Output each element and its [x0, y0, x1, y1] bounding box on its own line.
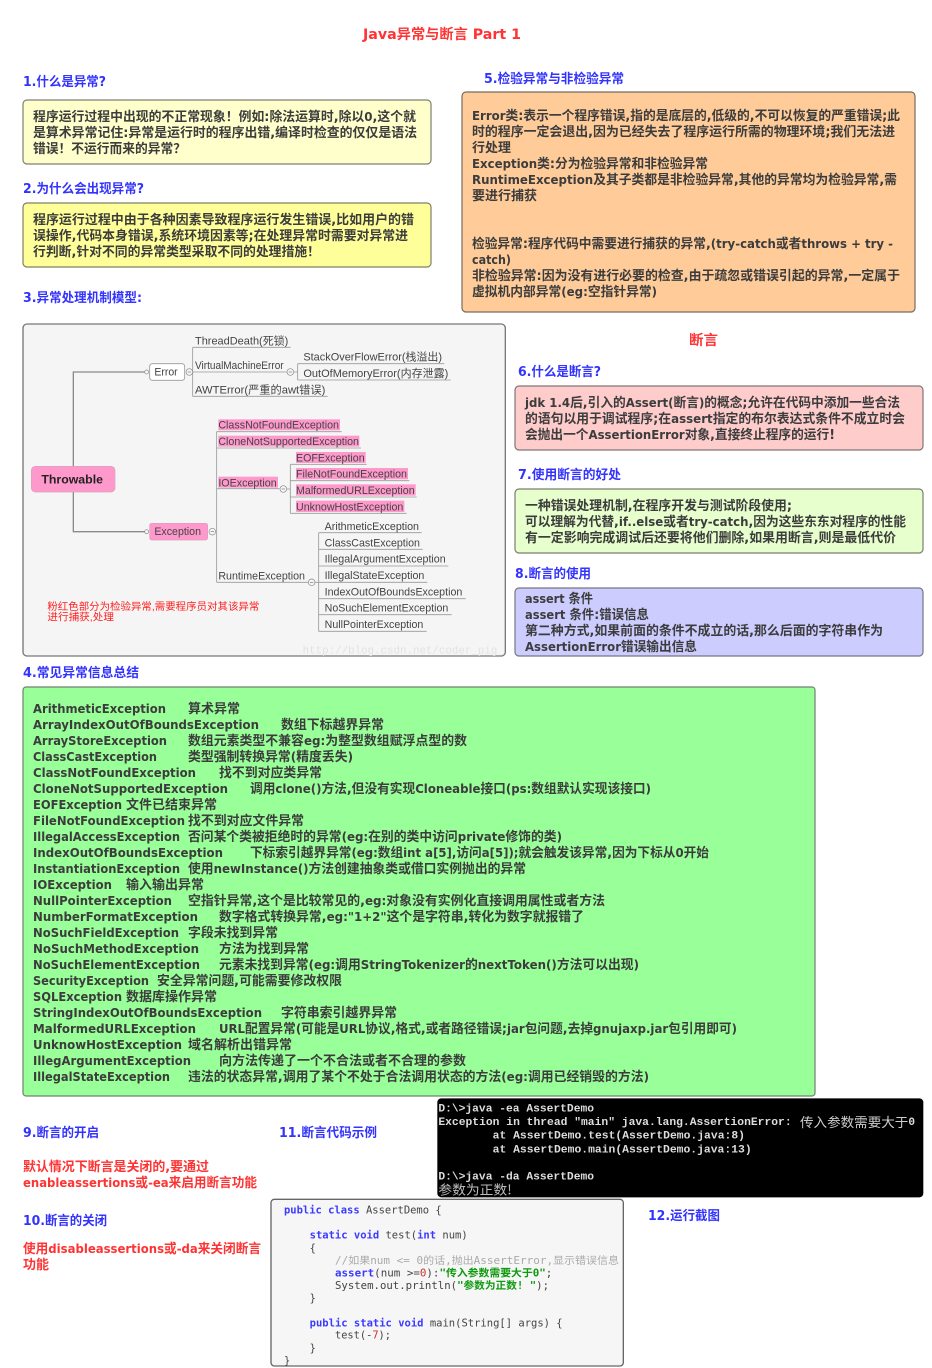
panel: common exception list — [23, 687, 815, 1096]
chart: Throwable mind map — [23, 324, 505, 657]
branch: runtime exceptions: IndexOutOfBoundsException — [325, 586, 462, 598]
panel: terminal screenshot — [437, 1098, 923, 1198]
branch: Error children — [193, 333, 451, 396]
panel: common exception list: InstantiationException — [33, 862, 180, 876]
panel: common exception list: NullPointerException — [33, 894, 172, 908]
panel: what is assert: jdk 1.4后,引入的Assert(断言)的概念;允许在代码中添加一些合法 — [524, 395, 900, 411]
branch: Error children: StackOverFlowError(栈溢出) — [303, 350, 442, 364]
panel: common exception list: ArithmeticException — [33, 702, 166, 716]
panel: code sample: //如果num <= 0的话,抛出AssertError,显示错误信息 — [335, 1254, 619, 1267]
panel: common exception list: 文件已结束异常 — [126, 797, 217, 813]
panel: common exception list: 字段未找到异常 — [188, 925, 278, 941]
panel: common exception list: 下标索引越界异常(eg:数组int a[5],访问a[5]);就会触发该异常,因为下标从0开始 — [250, 845, 709, 861]
note: pink meaning — [47, 600, 259, 624]
panel: common exception list: IOException — [33, 878, 112, 892]
panel: checked and unchecked exceptions: Error类:表示一个程序错误,指的是底层的,低级的,不可以恢复的严重错误;此 — [472, 108, 900, 124]
branch: checked exceptions in pink: UnknowHostException — [296, 501, 403, 513]
panel: what is an exception: 是算术异常记住:异常是运行时的程序出错,编译时检查的仅仅是语法 — [33, 125, 417, 141]
note: pink meaning: 进行捕获,处理 — [47, 611, 114, 624]
branch: runtime exceptions: ClassCastException — [325, 537, 420, 549]
branch: runtime exceptions: IllegalStateException — [325, 570, 424, 582]
panel: code sample: } — [284, 1355, 290, 1367]
node: Throwable — [31, 466, 115, 492]
panel: common exception list: 找不到对应文件异常 — [188, 813, 304, 829]
panel: common exception list: CloneNotSupportedException — [33, 782, 228, 796]
panel: terminal screenshot: at AssertDemo.main(AssertDemo.java:13) — [493, 1144, 752, 1156]
panel: checked and unchecked exceptions: 要进行捕获 — [472, 188, 537, 204]
panel: code sample: } — [310, 1343, 316, 1355]
heading: 9 enabling assertions: 9.断言的开启 — [23, 1125, 99, 1141]
heading: 11 code sample: 11.断言代码示例 — [279, 1125, 377, 1141]
panel: common exception list: 方法为找到异常 — [219, 941, 309, 957]
node: Exception — [145, 523, 216, 540]
branch: Error children: VirtualMachineError — [195, 360, 284, 372]
panel: checked and unchecked exceptions: 行处理 — [472, 140, 511, 156]
panel: common exception list: URL配置异常(可能是URL协议,格式,或者路径错误;jar包问题,去掉gnujaxp.jar包引用即可) — [219, 1021, 737, 1037]
text: enabling assertions: enableassertions或-ea来启用断言功能 — [23, 1175, 257, 1191]
panel: common exception list: NoSuchMethodException — [33, 942, 199, 956]
panel: code sample: { — [310, 1242, 316, 1254]
branch: runtime exceptions: NoSuchElementException — [325, 603, 448, 615]
panel: checked and unchecked exceptions: catch) — [472, 253, 511, 267]
panel: common exception list: EOFException — [33, 798, 122, 812]
node: Error — [145, 364, 193, 380]
panel: common exception list: 输入输出异常 — [126, 877, 204, 893]
branch: checked exceptions in pink: CloneNotSupportedException — [218, 436, 359, 448]
panel: what is assert: 会抛出一个AssertionError对象,直接终止程序的运行! — [525, 427, 835, 443]
heading: 7 benefits: 7.使用断言的好处 — [518, 467, 621, 483]
panel: common exception list: ArrayStoreException — [33, 734, 167, 748]
panel: common exception list: MalformedURLException — [33, 1022, 196, 1036]
panel: common exception list: 向方法传递了一个不合法或者不合理的参数 — [219, 1053, 466, 1069]
heading: 8 usage: 8.断言的使用 — [515, 566, 591, 582]
panel: benefits of assertions: 可以理解为代替,if..else或者try-catch,因为这些东东对程序的性能 — [525, 514, 906, 530]
panel: common exception list: StringIndexOutOfBoundsException — [33, 1006, 262, 1020]
panel: checked and unchecked exceptions: 非检验异常:因为没有进行必要的检查,由于疏忽或错误引起的异常,一定属于 — [472, 268, 900, 284]
panel: why exceptions occur — [23, 203, 431, 267]
panel: common exception list: 数组下标越界异常 — [281, 717, 384, 733]
heading: 6 what is assert: 6.什么是断言? — [518, 364, 601, 380]
panel: common exception list: ArrayIndexOutOfBoundsException — [33, 718, 259, 732]
panel: common exception list: 找不到对应类异常 — [219, 765, 322, 781]
panel: why exceptions occur: 误操作,代码本身错误,系统环境因素等;在处理异常时需要对异常进 — [33, 228, 408, 244]
branch: checked exceptions in pink: MalformedURLException — [296, 485, 415, 497]
panel: code sample: static void test(int num) — [310, 1230, 468, 1242]
text: disabling assertions: 使用disableassertions或-da来关闭断言 — [23, 1241, 261, 1257]
panel: common exception list: SecurityException — [33, 974, 149, 988]
panel: assert usage: assert 条件:错误信息 — [525, 607, 649, 623]
panel: common exception list: 类型强制转换异常(精度丢失) — [188, 749, 353, 765]
panel: why exceptions occur: 行判断,针对不同的异常类型采取不同的处理措施！ — [33, 241, 320, 260]
node: Error: Error — [154, 366, 178, 378]
panel: assert usage — [515, 588, 923, 656]
panel: terminal screenshot: D:\>java -ea AssertDemo — [438, 1104, 594, 1116]
panel: what is an exception: 错误！不运行而来的异常？ — [33, 138, 186, 157]
panel: code sample: public class AssertDemo { — [284, 1205, 442, 1217]
panel: assert usage: 第二种方式,如果前面的条件不成立的话,那么后面的字符串作为 — [525, 623, 883, 639]
panel: common exception list: NoSuchFieldException — [33, 926, 179, 940]
panel: common exception list: 调用clone()方法,但没有实现Cloneable接口(ps:数组默认实现该接口) — [250, 781, 651, 797]
panel: checked and unchecked exceptions: RuntimeException及其子类都是非检验异常,其他的异常均为检验异常,需 — [472, 172, 897, 188]
panel: common exception list: 安全异常问题,可能需要修改权限 — [157, 973, 342, 989]
branch: checked exceptions in pink: EOFException — [296, 452, 365, 464]
panel: assert usage: assert 条件 — [525, 591, 593, 607]
heading: 2 why exceptions occur: 2.为什么会出现异常? — [23, 181, 144, 197]
panel: what is assert — [515, 386, 923, 450]
branch: checked exceptions in pink — [217, 419, 417, 582]
branch: runtime exceptions: IllegalArgumentException — [325, 554, 446, 566]
panel: what is an exception: 程序运行过程中出现的不正常现象！例如:除法运算时,除以0,这个就 — [33, 106, 416, 125]
branch: checked exceptions in pink: ClassNotFoundException — [218, 420, 339, 432]
panel: code sample: test(-7); — [335, 1330, 391, 1342]
panel: common exception list: 域名解析出错异常 — [188, 1037, 292, 1053]
branch: runtime exceptions: RuntimeException — [218, 570, 305, 582]
heading: 5 checked and unchecked: 5.检验异常与非检验异常 — [484, 71, 624, 87]
panel: code sample — [271, 1199, 623, 1367]
panel: common exception list: FileNotFoundException — [33, 814, 185, 828]
panel: common exception list: IndexOutOfBoundsException — [33, 846, 223, 860]
panel: terminal screenshot: Exception in thread "main" java.lang.AssertionError: — [438, 1117, 792, 1129]
panel: what is assert: 的语句以用于调试程序;在assert指定的布尔表达式条件不成立时会 — [525, 411, 905, 427]
panel: common exception list: SQLException — [33, 990, 122, 1004]
node: Throwable: Throwable — [41, 472, 103, 486]
heading: assertions: 断言 — [689, 332, 718, 349]
panel: benefits of assertions — [515, 489, 923, 553]
branch: checked exceptions in pink: IOException — [218, 477, 277, 489]
panel: common exception list: 否问某个类被拒绝时的异常(eg:在别的类中访问private修饰的类) — [188, 829, 562, 845]
heading: 3 exception handling model: 3.异常处理机制模型: — [23, 290, 142, 306]
panel: common exception list: 数组元素类型不兼容eg:为整型数组赋浮点型的数 — [188, 733, 467, 749]
panel: terminal screenshot: at AssertDemo.test(AssertDemo.java:8) — [493, 1131, 745, 1143]
panel: code sample: assert(num >=0):"传入参数需要大于0"; — [335, 1266, 552, 1279]
panel: common exception list: NumberFormatException — [33, 910, 198, 924]
panel: common exception list: 数字格式转换异常,eg:"1+2"这个是字符串,转化为数字就报错了 — [219, 909, 584, 925]
panel: common exception list: IllegalStateException — [33, 1070, 170, 1084]
panel: terminal screenshot: 0 — [908, 1117, 915, 1129]
panel: terminal screenshot: 传入参数需要大于 — [800, 1112, 908, 1131]
panel: checked and unchecked exceptions: Exception类:分为检验异常和非检验异常 — [472, 156, 708, 172]
panel: code sample: System.out.println("参数为正数! "); — [335, 1279, 549, 1292]
branch: Error children: ThreadDeath(死锁) — [195, 333, 288, 347]
panel: common exception list: NoSuchElementException — [33, 958, 200, 972]
node: Exception: Exception — [154, 526, 201, 538]
branch: Error children: OutOfMemoryError(内存泄露) — [303, 366, 448, 380]
text: disabling assertions — [23, 1241, 261, 1273]
panel: benefits of assertions: 有一定影响完成调试后还要将他们删除,如果用断言,则是最低代价 — [525, 530, 896, 546]
panel: common exception list: 空指针异常,这个是比较常见的,eg:对象没有实例化直接调用属性或者方法 — [188, 893, 605, 909]
panel: terminal screenshot: D:\>java -da AssertDemo — [438, 1172, 594, 1184]
panel: what is an exception — [23, 100, 431, 164]
panel: benefits of assertions: 一种错误处理机制,在程序开发与测试阶段使用; — [525, 498, 792, 514]
branch: runtime exceptions: NullPointerException — [325, 619, 423, 631]
panel: common exception list: IllegalAccessException — [33, 830, 180, 844]
panel: common exception list: ClassCastException — [33, 750, 157, 764]
panel: common exception list: 使用newInstance()方法创建抽象类或借口实例抛出的异常 — [188, 861, 526, 877]
panel: checked and unchecked exceptions — [462, 92, 915, 312]
text: enabling assertions: 默认情况下断言是关闭的,要通过 — [23, 1159, 209, 1175]
panel: checked and unchecked exceptions: 虚拟机内部异常(eg:空指针异常) — [472, 284, 657, 300]
panel: common exception list: 违法的状态异常,调用了某个不处于合法调用状态的方法(eg:调用已经销毁的方法) — [188, 1069, 649, 1085]
panel: checked and unchecked exceptions: 检验异常:程序代码中需要进行捕获的异常,(try-catch或者throws + try - — [472, 236, 893, 252]
heading: 1 what is an exception: 1.什么是异常? — [23, 74, 106, 90]
branch: checked exceptions in pink: FileNotFoundException — [296, 469, 407, 481]
note: pink meaning: 粉红色部分为检验异常,需要程序员对其该异常 — [47, 600, 259, 613]
watermark: http://blog.csdn.net/coder_pig — [303, 645, 497, 657]
panel: checked and unchecked exceptions: 时的程序一定会退出,因为已经失去了程序运行所需的物理环境;我们无法进 — [472, 124, 895, 140]
heading: 10 disabling assertions: 10.断言的关闭 — [23, 1213, 107, 1229]
text: enabling assertions — [23, 1159, 257, 1191]
heading: 12 run screenshot: 12.运行截图 — [648, 1208, 720, 1224]
panel: common exception list: IllegArgumentException — [33, 1054, 191, 1068]
panel: why exceptions occur: 程序运行过程中由于各种因素导致程序运行发生错误,比如用户的错 — [33, 212, 414, 228]
branch: runtime exceptions: ArithmeticException — [325, 521, 419, 533]
heading: 4 common exceptions: 4.常见异常信息总结 — [23, 665, 139, 681]
panel: terminal screenshot: 参数为正数! — [438, 1179, 512, 1198]
panel: common exception list: 字符串索引越界异常 — [281, 1005, 397, 1021]
panel: common exception list: ClassNotFoundException — [33, 766, 196, 780]
panel: common exception list: 算术异常 — [188, 701, 240, 717]
branch: runtime exceptions — [218, 521, 466, 631]
text: disabling assertions: 功能 — [23, 1257, 49, 1273]
panel: code sample: } — [310, 1293, 316, 1305]
title: Java异常与断言 Part 1 — [362, 26, 521, 43]
panel: assert usage: AssertionError错误输出信息 — [525, 639, 697, 655]
panel: common exception list: 元素未找到异常(eg:调用StringTokenizer的nextToken()方法可以出现) — [219, 957, 639, 973]
panel: code sample: public static void main(String[] args) { — [310, 1317, 563, 1329]
branch: Error children: AWTError(严重的awt错误) — [195, 382, 325, 396]
panel: common exception list: 数据库操作异常 — [126, 989, 217, 1005]
panel: common exception list: UnknowHostException — [33, 1038, 182, 1052]
